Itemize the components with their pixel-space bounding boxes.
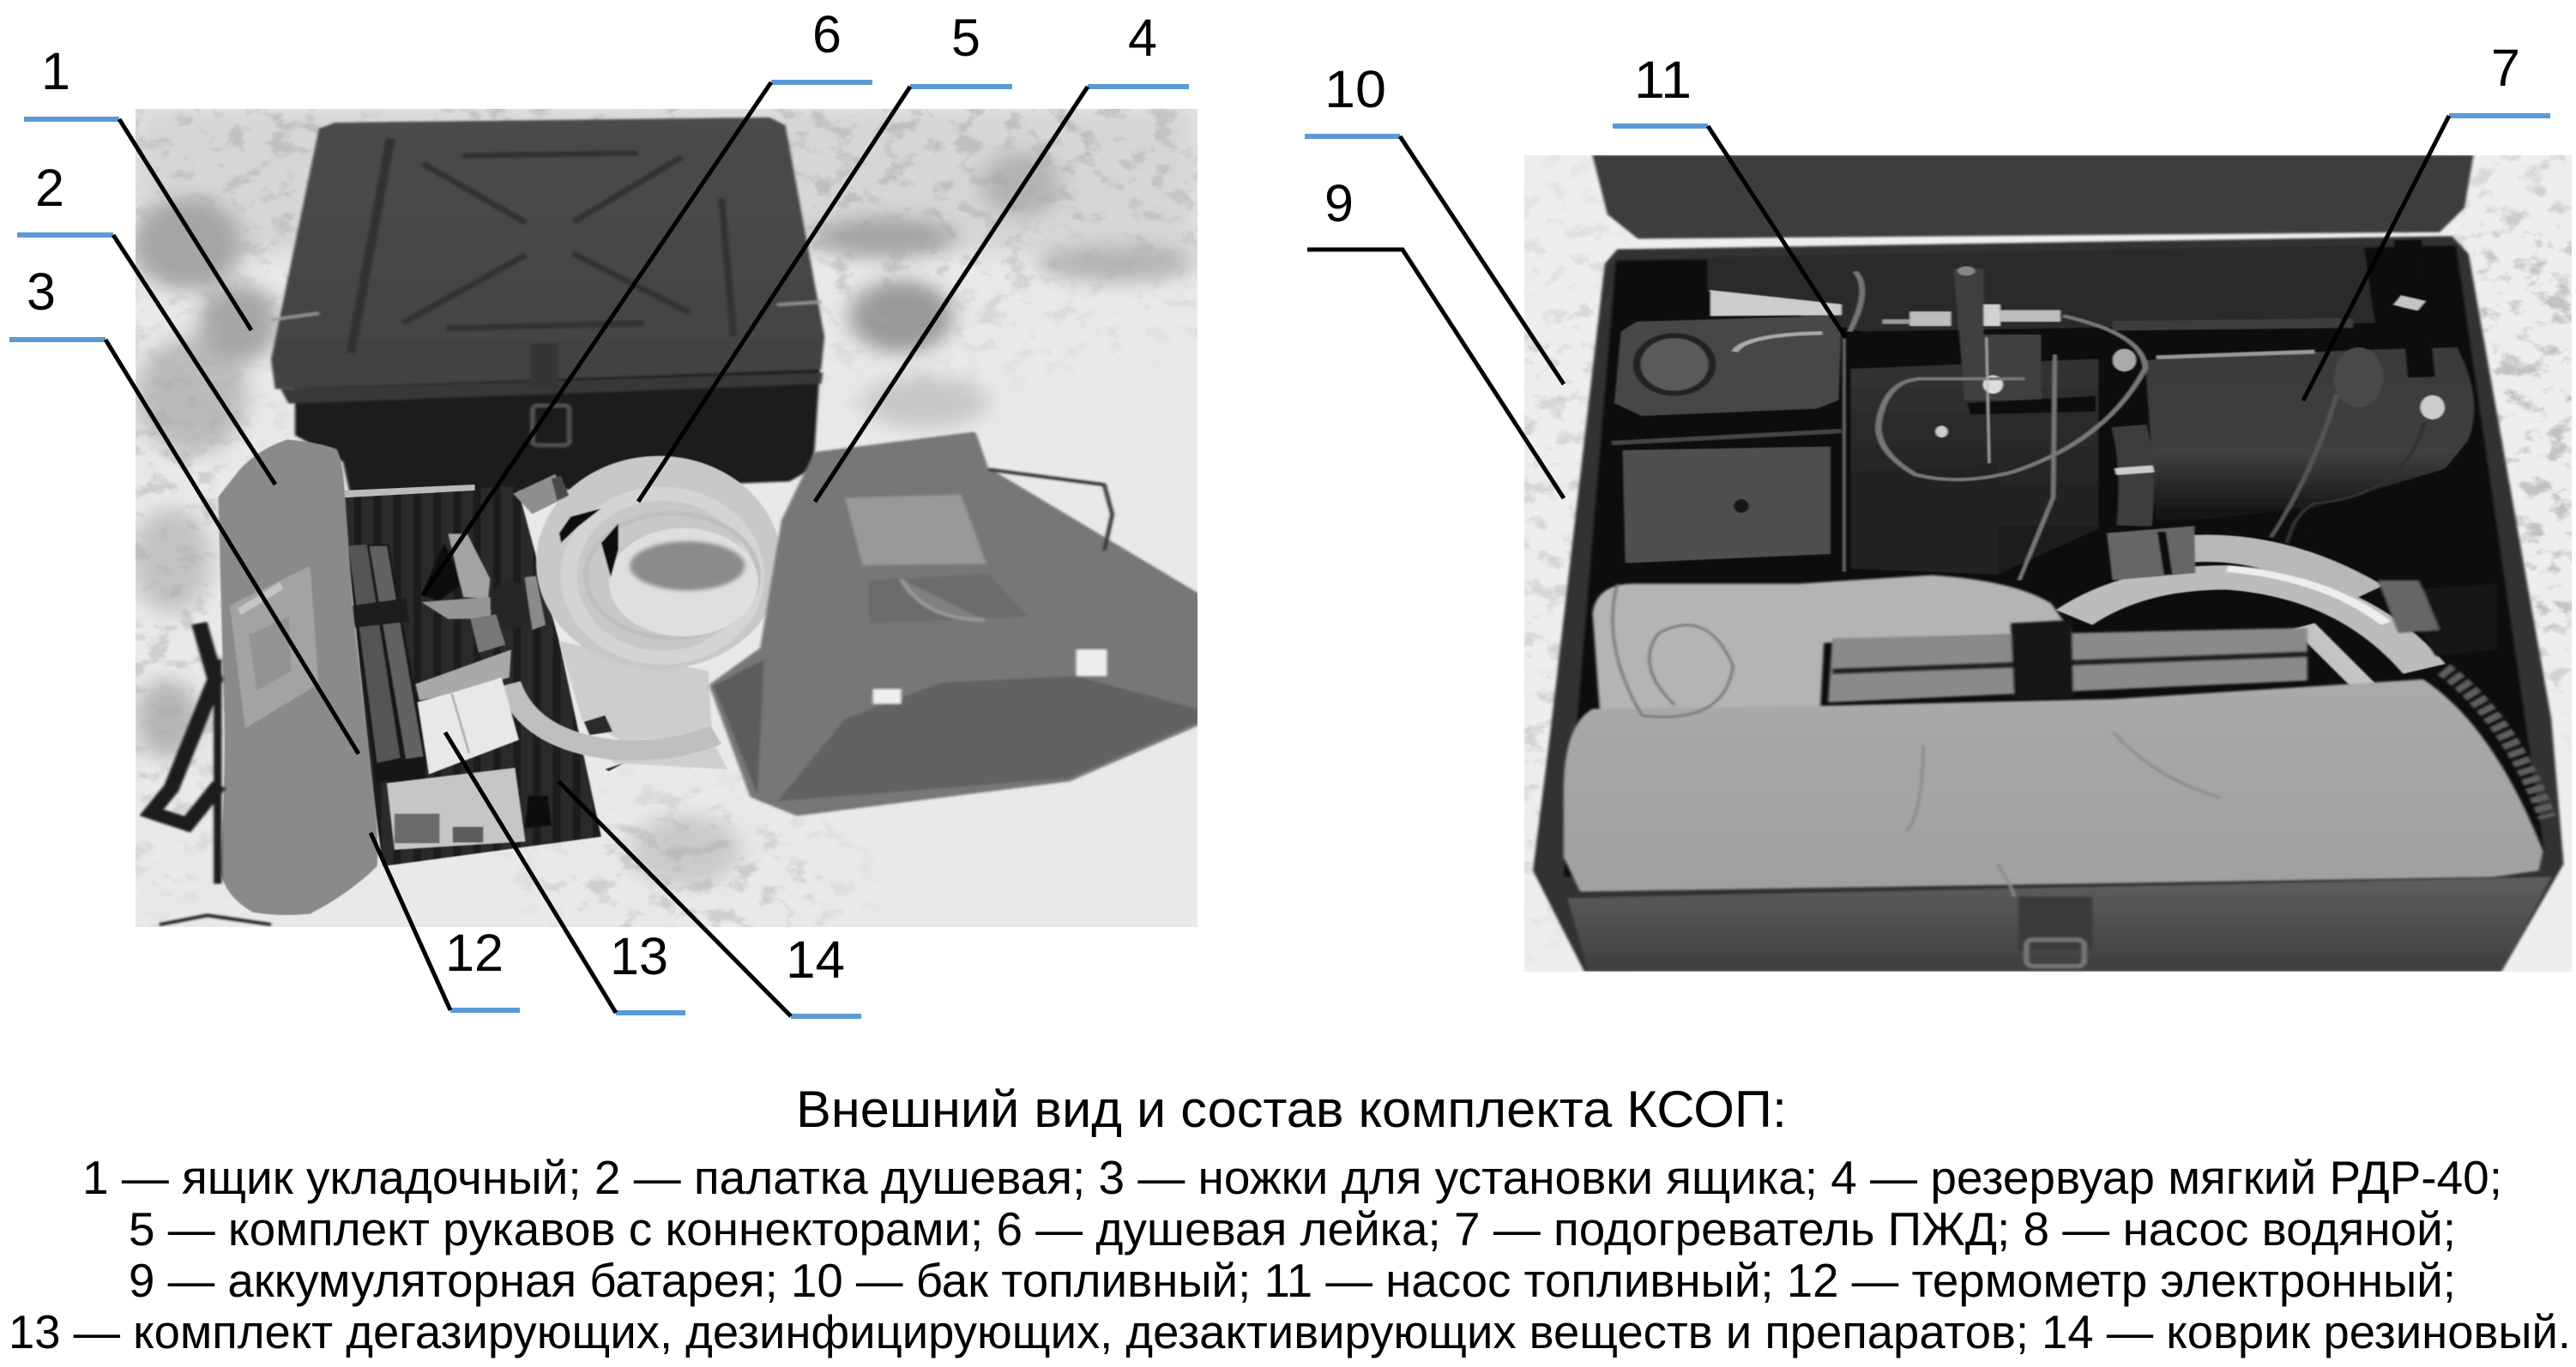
- snow strip behind mat: [345, 485, 475, 497]
- callout 5: [638, 9, 1012, 502]
- contents, coordinates relative to the box upper area: [1612, 240, 2474, 686]
- pack of agents: [387, 649, 525, 850]
- callout 12: 12: [445, 924, 504, 982]
- closed storage box: [271, 117, 824, 498]
- callout 14: [558, 781, 861, 1016]
- folded legs on top: [1828, 620, 2308, 702]
- callout 7: [2303, 39, 2550, 400]
- callout 3: [9, 262, 359, 754]
- heading: Внешний вид и состав комплекта КСОП:: [796, 1081, 1787, 1138]
- soft tank RDR-40: [714, 436, 1198, 812]
- legend text: 5 — комплект рукавов с коннекторами; 6 — душевая лейка; 7 — подогреватель ПЖД; 8 — насос водяной;: [129, 1202, 2456, 1256]
- photo: open KSOP box with contents: [1524, 155, 2572, 972]
- kit items on mat, coordinates relative to the central area: [218, 440, 781, 915]
- callout 9: 9: [1324, 174, 1354, 232]
- callout 12: [371, 833, 520, 1010]
- callout 1: 1: [41, 42, 70, 100]
- callout 13: [445, 732, 685, 1013]
- callout 9: [1307, 174, 1564, 498]
- cap and bolts: [2334, 347, 2383, 407]
- callout 1: [24, 42, 251, 330]
- bracket and pump: [1953, 268, 2042, 400]
- hoses: [2074, 548, 2424, 686]
- callout 13: 13: [610, 927, 668, 985]
- shelf and divider: [1612, 431, 1842, 443]
- right side connector, rope, fabric and legs: [1564, 575, 2547, 897]
- callout 6: [423, 5, 872, 595]
- coiled hoses: [510, 456, 781, 771]
- connectors and shower head: [421, 474, 569, 828]
- rubber mat: [343, 485, 601, 866]
- callout 2: [17, 159, 275, 485]
- tent straps: [152, 623, 271, 924]
- fuel tank: [1614, 316, 1842, 416]
- heater main cylinder: [2145, 347, 2474, 525]
- callout 10: [1305, 60, 1564, 384]
- callout 5: 5: [951, 9, 980, 67]
- snow and grass patches: [131, 109, 1198, 887]
- folding legs: [347, 545, 427, 782]
- legend text: 13 — комплект дегазирующих, дезинфицирующих, дезактивирующих веществ и препаратов; 14 — коврик резиновый.: [9, 1305, 2571, 1358]
- callout 2: 2: [35, 159, 64, 217]
- fuel tubes: [1849, 240, 2424, 581]
- legend text: 1 — ящик укладочный; 2 — палатка душевая; 3 — ножки для установки ящика; 4 — резервуар мягкий РДР-40;: [82, 1151, 2502, 1204]
- folded tent fabric: [1564, 575, 2543, 897]
- shower tent bag: [218, 440, 377, 915]
- callout 7: 7: [2491, 39, 2520, 97]
- callout 11: [1613, 51, 1846, 338]
- photo: KSOP kit laid out on snow: [136, 109, 1198, 927]
- paper note: [1710, 290, 1842, 316]
- callout 3: 3: [27, 262, 56, 321]
- open lid and outer body: [1533, 155, 2564, 972]
- blower block: [1854, 568, 1997, 575]
- callout 10: 10: [1324, 60, 1386, 118]
- heater burner section: [1851, 358, 2099, 575]
- battery: [1622, 447, 1831, 563]
- callout 11: 11: [1634, 51, 1692, 109]
- back wall: [1707, 246, 2375, 332]
- callout 4: 4: [1128, 9, 1157, 67]
- callout 6: 6: [812, 5, 842, 63]
- callout 4: [815, 9, 1189, 502]
- background mottling: [1524, 183, 1608, 934]
- legend text: 9 — аккумуляторная батарея; 10 — бак топливный; 11 — насос топливный; 12 — термометр электронный;: [129, 1254, 2456, 1307]
- legend text: [9, 1151, 2571, 1358]
- hose connector: [2107, 526, 2195, 581]
- callout 14: 14: [786, 930, 845, 989]
